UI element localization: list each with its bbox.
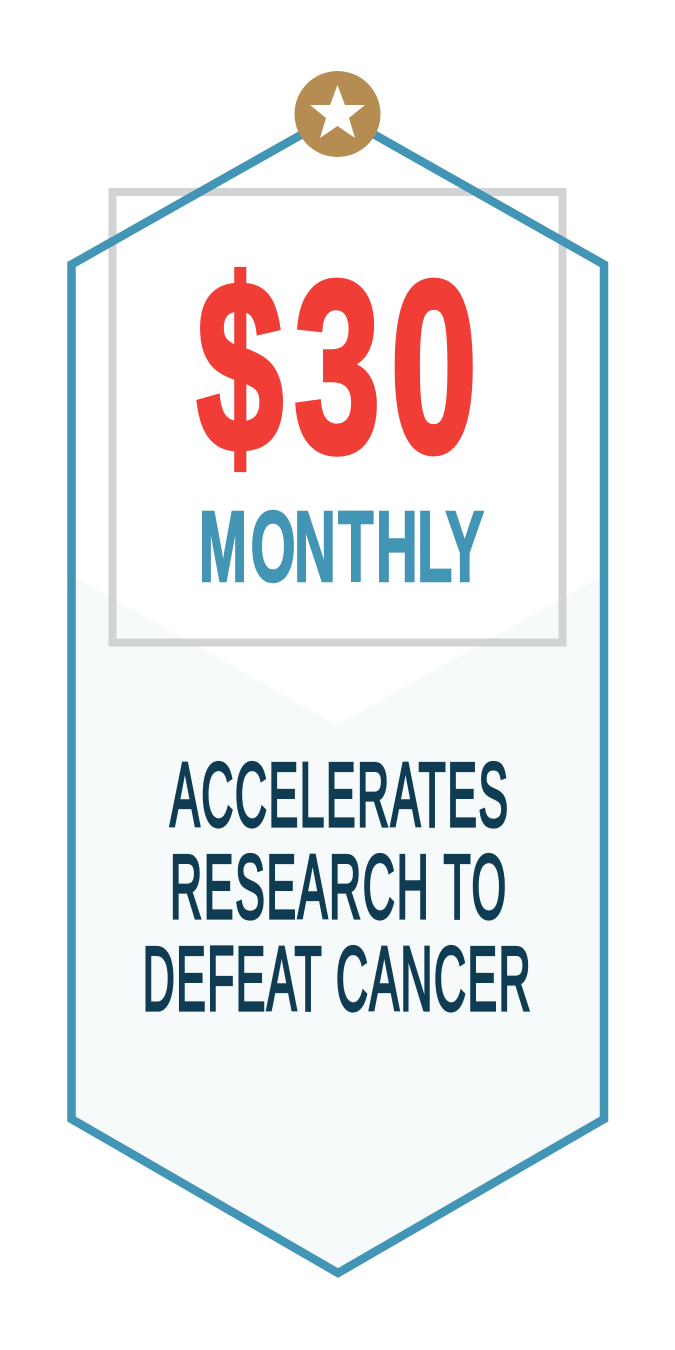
- subheading: monthly: MONTHLY: [199, 492, 484, 603]
- icon: gold star badge: [294, 71, 380, 157]
- panel: grey square frame: [112, 192, 562, 642]
- text block: mission statement: DEFEAT CANCER: [143, 929, 531, 1030]
- headline: $30: $30: [196, 232, 477, 503]
- text block: mission statement: [143, 745, 531, 1030]
- text block: mission statement: RESEARCH TO: [170, 837, 506, 938]
- panel: light lower background: [71, 575, 604, 1273]
- text block: mission statement: ACCELERATES: [170, 745, 508, 846]
- panel: hexagon outline: [72, 114, 604, 1273]
